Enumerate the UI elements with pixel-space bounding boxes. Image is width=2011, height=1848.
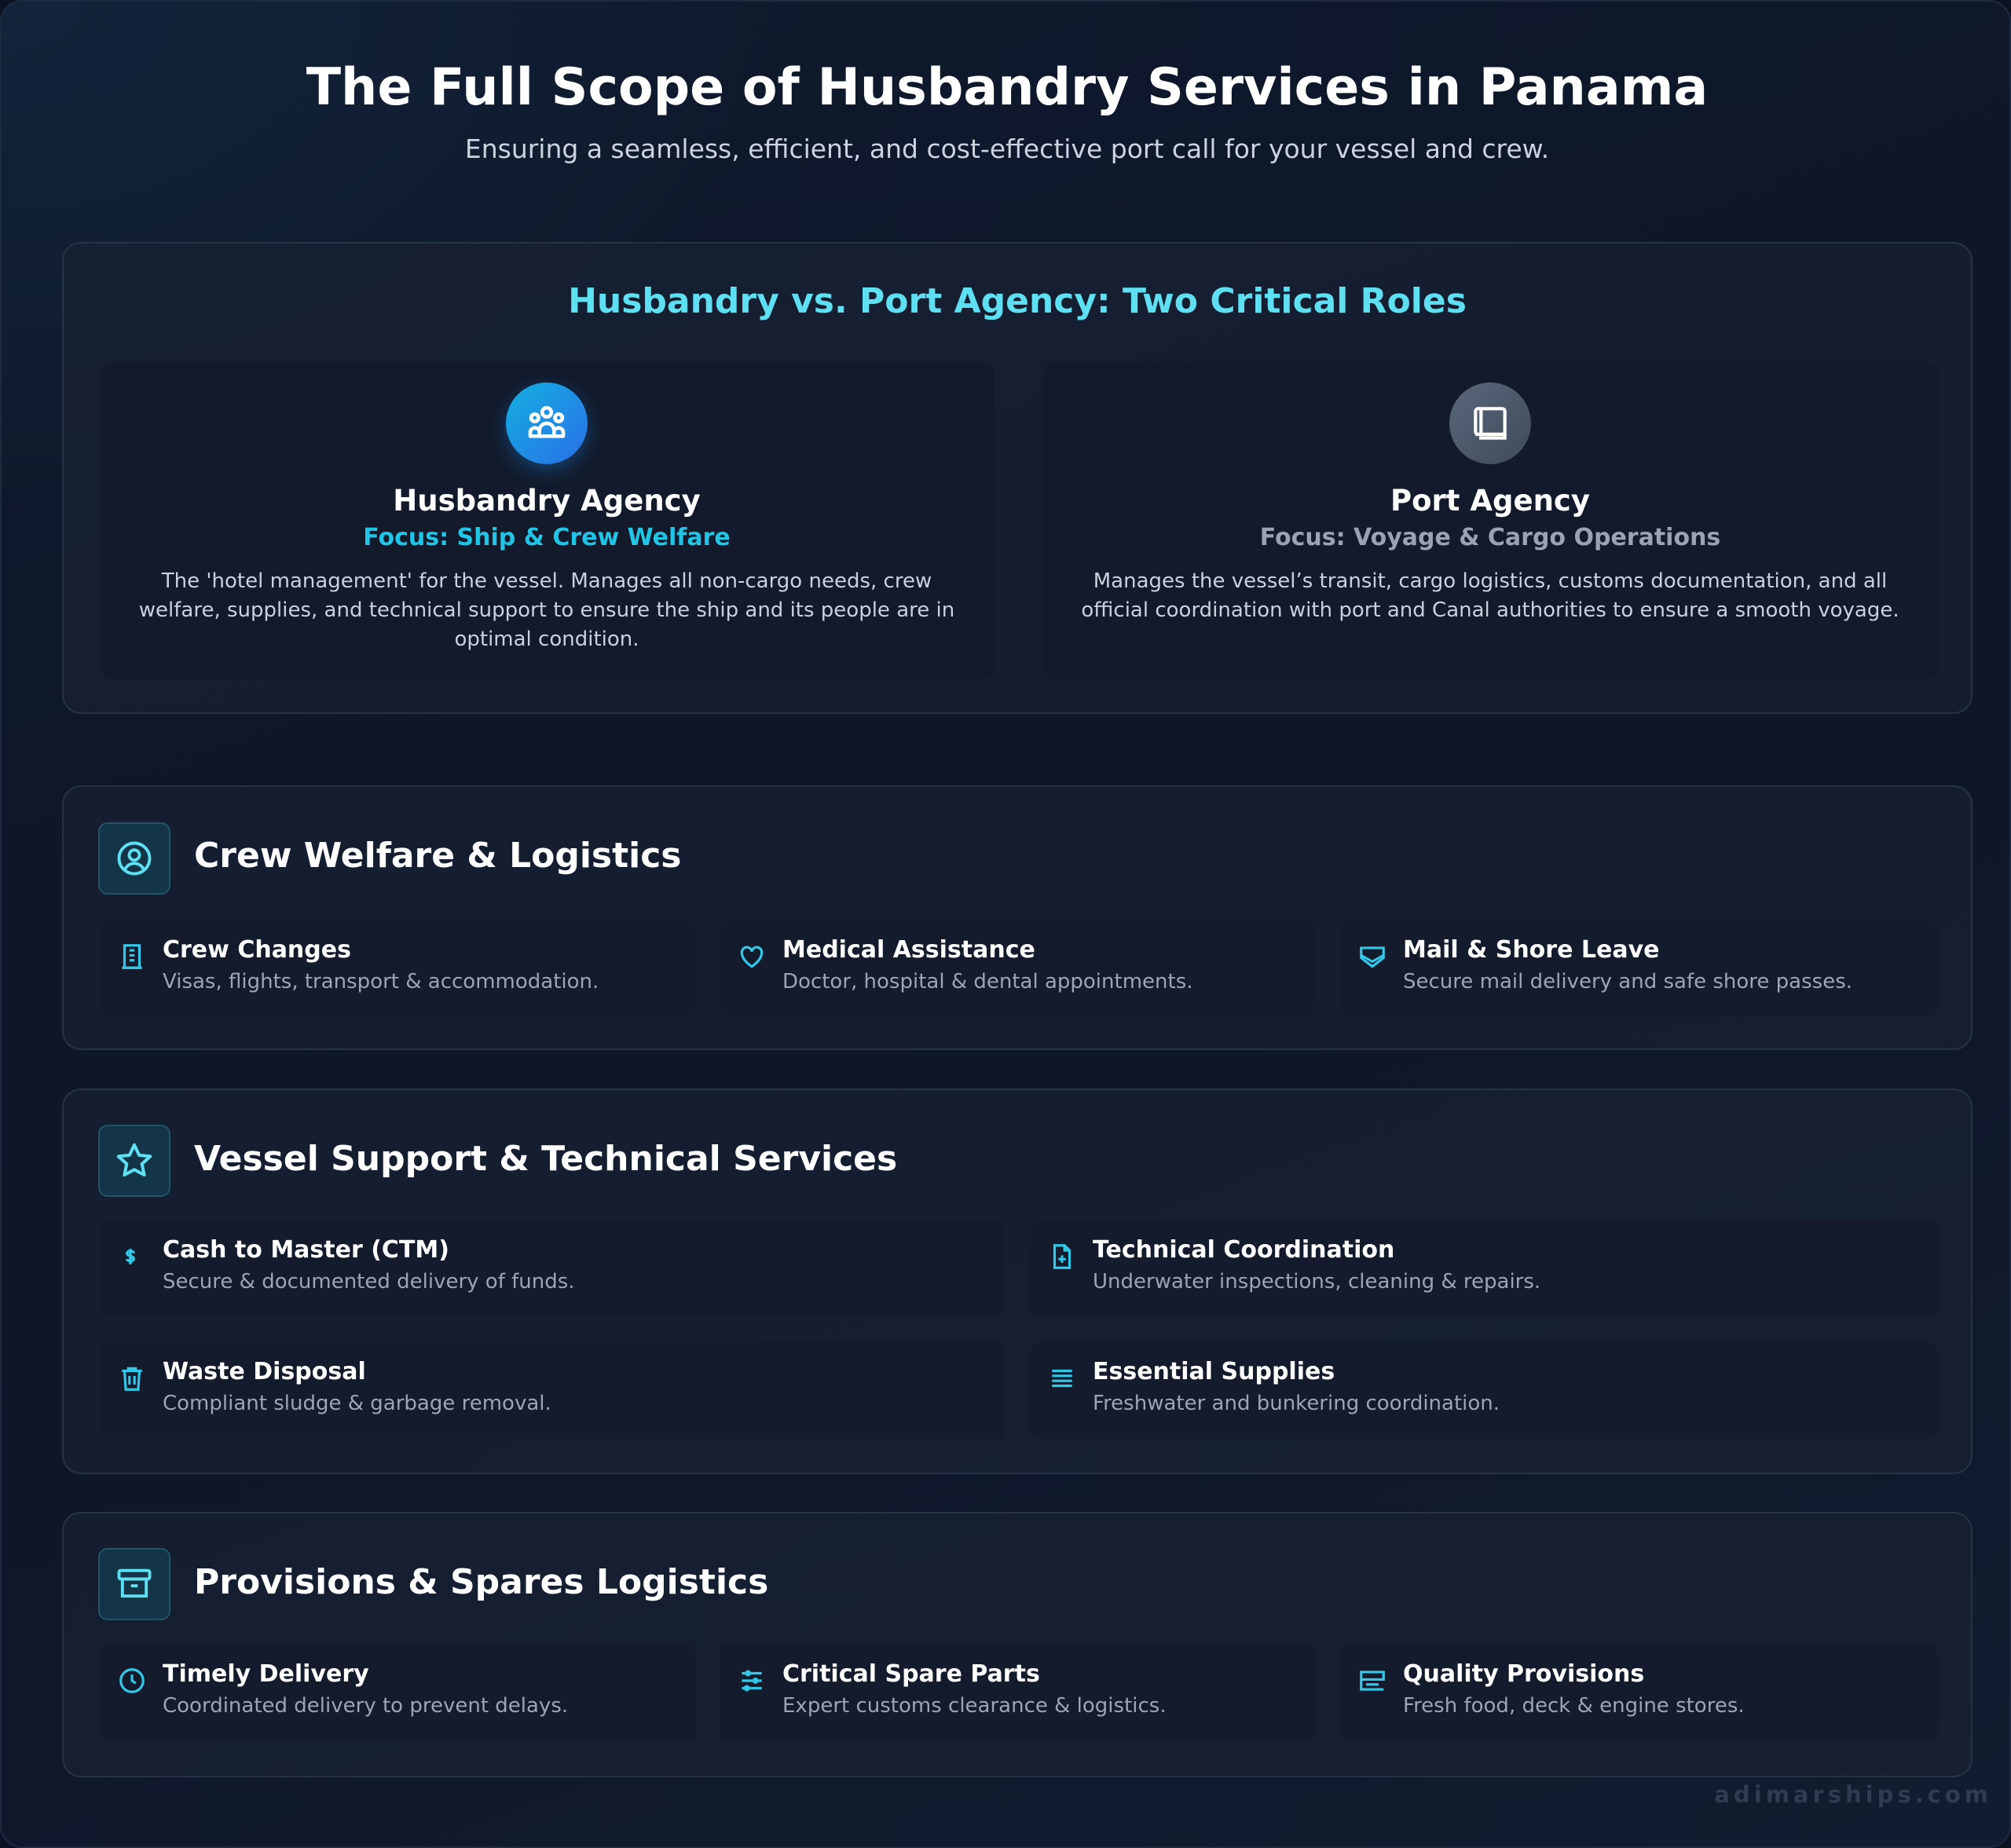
title: The Full Scope of Husbandry Services in Panama: [306, 58, 1708, 117]
icon: people: [506, 382, 588, 464]
icon: star: [98, 1125, 170, 1197]
item: critical spare parts: Critical Spare Parts: [782, 1660, 1040, 1688]
item: essential supplies: Essential Supplies: [1093, 1358, 1335, 1385]
item: timely delivery: Timely Delivery: [163, 1660, 369, 1688]
description: Manages the vessel’s transit, cargo logistics, customs documentation, and all official coordination with port and Canal authorities to ensure a smooth voyage.: [1081, 569, 1899, 622]
item: quality provisions: Fresh food, deck & engine stores.: [1403, 1694, 1745, 1718]
item: cash to master: Secure & documented delivery of funds.: [163, 1270, 575, 1294]
item: timely delivery: [100, 1644, 696, 1741]
item: technical coordination: Underwater inspections, cleaning & repairs.: [1093, 1270, 1540, 1294]
item: critical spare parts: [720, 1644, 1317, 1741]
item: waste disposal: [100, 1341, 1006, 1439]
heading: Provisions & Spares Logistics: [194, 1562, 768, 1602]
item: crew changes: [100, 920, 696, 1017]
item: timely delivery: Coordinated delivery to prevent delays.: [163, 1694, 568, 1718]
item: cash to master: Cash to Master (CTM): [163, 1236, 449, 1264]
heading: Vessel Support & Technical Services: [194, 1139, 897, 1179]
item: mail & shore leave: [1340, 920, 1938, 1017]
item: technical coordination: [1030, 1220, 1938, 1317]
item: waste disposal: Compliant sludge & garbage removal.: [163, 1392, 551, 1415]
item: critical spare parts: Expert customs clearance & logistics.: [782, 1694, 1167, 1718]
panel: provisions & spares: [62, 1512, 1973, 1777]
item: medical assistance: Medical Assistance: [782, 936, 1035, 964]
item: mail & shore leave: Secure mail delivery and safe shore passes.: [1403, 970, 1852, 994]
watermark: adimarships.com: [1714, 1781, 1992, 1808]
item: crew changes: Visas, flights, transport & accommodation.: [163, 970, 599, 994]
icon: user circle: [98, 822, 170, 895]
heading: Crew Welfare & Logistics: [194, 836, 682, 876]
item: mail & shore leave: Mail & Shore Leave: [1403, 936, 1659, 964]
item: medical assistance: [720, 920, 1317, 1017]
panel: crew welfare & logistics: [62, 785, 1973, 1050]
item: quality provisions: Quality Provisions: [1403, 1660, 1644, 1688]
item: essential supplies: Freshwater and bunkering coordination.: [1093, 1392, 1500, 1415]
item: cash to master: [100, 1220, 1006, 1317]
panel: husbandry vs port agency: [62, 242, 1973, 714]
card title: Husbandry Agency: [393, 484, 701, 518]
description: The 'hotel management' for the vessel. Manages all non-cargo needs, crew welfare, supplies, and technical support to ensure the ship and its people are in optimal condition.: [139, 569, 954, 651]
item: crew changes: Crew Changes: [163, 936, 351, 964]
item: essential supplies: [1030, 1341, 1938, 1439]
subtitle: Ensuring a seamless, efficient, and cost-effective port call for your vessel and crew.: [465, 134, 1549, 164]
icon: archive: [98, 1548, 170, 1620]
icon: document: [1449, 382, 1531, 464]
panel heading: Husbandry vs. Port Agency: Two Critical Roles: [568, 281, 1467, 321]
card title: Port Agency: [1390, 484, 1590, 518]
focus: Focus: Voyage & Cargo Operations: [1260, 524, 1720, 551]
card: husbandry agency: [100, 361, 994, 679]
item: quality provisions: [1340, 1644, 1938, 1741]
item: technical coordination: Technical Coordination: [1093, 1236, 1394, 1264]
item: waste disposal: Waste Disposal: [163, 1358, 366, 1385]
item: medical assistance: Doctor, hospital & dental appointments.: [782, 970, 1193, 994]
panel: vessel support: [62, 1089, 1973, 1474]
card: port agency: [1042, 361, 1938, 679]
focus: Focus: Ship & Crew Welfare: [363, 524, 731, 551]
